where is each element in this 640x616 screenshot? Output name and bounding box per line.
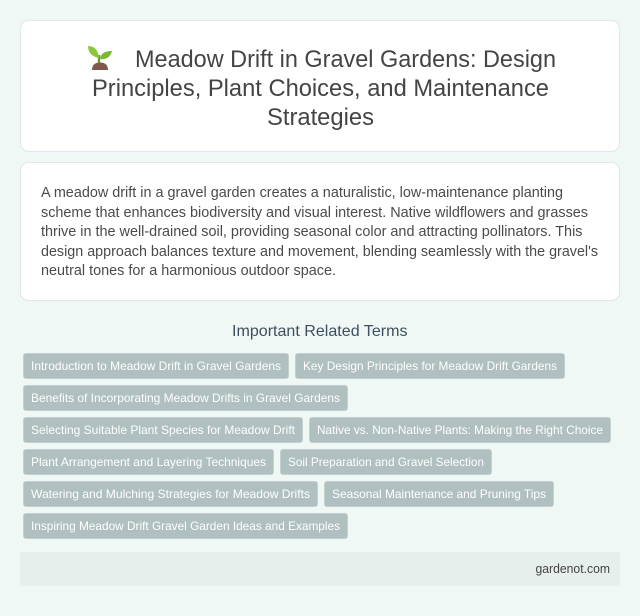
chip: plant arrangement: Plant Arrangement and Layering Techniques [31, 455, 266, 469]
title: Strategies [267, 104, 374, 131]
chip: key design principles [296, 354, 564, 378]
chip: benefits: Benefits of Incorporating Meadow Drifts in Gravel Gardens [31, 391, 340, 405]
panel: related terms chips [24, 354, 610, 538]
chip: introduction [24, 354, 288, 378]
title [92, 46, 556, 131]
chip: introduction: Introduction to Meadow Drift in Gravel Gardens [31, 359, 281, 373]
footer [20, 552, 620, 586]
footer: gardenot.com [536, 562, 610, 576]
description text: neutral tones for a harmonious outdoor space. [41, 263, 336, 279]
chip: soil preparation [280, 450, 492, 474]
chip: watering and mulching: Watering and Mulching Strategies for Meadow Drifts [31, 487, 310, 501]
chip: native vs non-native [310, 418, 610, 442]
title: Meadow Drift in Gravel Gardens: Design [135, 46, 556, 73]
description text: A meadow drift in a gravel garden creates a naturalistic, low-maintenance planting [41, 185, 563, 201]
chip: soil preparation: Soil Preparation and Gravel Selection [288, 455, 484, 469]
chip: seasonal maintenance: Seasonal Maintenance and Pruning Tips [332, 487, 546, 501]
chip: inspiring ideas: Inspiring Meadow Drift Gravel Garden Ideas and Examples [31, 519, 340, 533]
chip: selecting species [24, 418, 302, 442]
chip: seasonal maintenance [324, 482, 554, 506]
description text: thrive in the well-drained soil, providing seasonal color and attracting pollinators. This [41, 224, 582, 240]
description text [41, 185, 598, 279]
chip: native vs non-native: Native vs. Non-Native Plants: Making the Right Choice [317, 423, 603, 437]
chip: key design principles: Key Design Principles for Meadow Drift Gardens [303, 359, 557, 373]
heading: important related terms: Important Related Terms [232, 323, 408, 340]
description text: scheme that enhances biodiversity and visual interest. Native wildflowers and grasses [41, 205, 588, 221]
icon: seedling [88, 46, 112, 70]
chip: inspiring ideas [24, 514, 348, 538]
chip: benefits [24, 386, 348, 410]
chip: watering and mulching [24, 482, 318, 506]
panel: description card [20, 162, 620, 300]
chip: selecting species: Selecting Suitable Plant Species for Meadow Drift [31, 423, 296, 437]
title: Principles, Plant Choices, and Maintenance [92, 75, 549, 102]
description text: design approach balances texture and movement, blending seamlessly with the gravel's [41, 244, 598, 260]
panel: title card [20, 20, 620, 152]
chip: plant arrangement [24, 450, 274, 474]
